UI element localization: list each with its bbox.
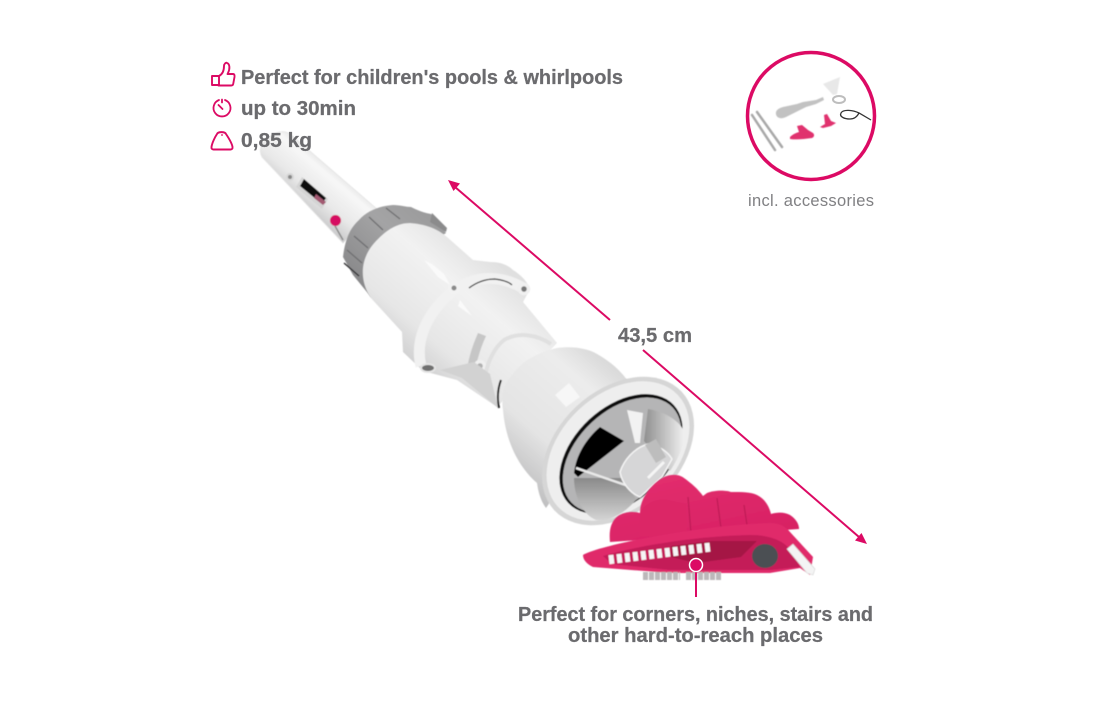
handle tube xyxy=(260,132,377,243)
callout text: other hard-to-reach places xyxy=(568,625,823,647)
white side brush xyxy=(787,544,815,575)
lower grey cone xyxy=(574,478,636,520)
base plate xyxy=(583,523,813,575)
accessories label: incl. accessories xyxy=(748,192,874,210)
accessory: vacuum xyxy=(776,97,824,118)
feature: pools: Perfect for children's pools & whirlpools xyxy=(241,67,623,89)
grey collar xyxy=(343,205,447,297)
accessory: poles xyxy=(752,112,782,150)
accessory: nozzle xyxy=(820,114,836,128)
accessory: ring xyxy=(833,96,845,103)
accessories badge xyxy=(748,52,874,180)
black wedge xyxy=(574,427,624,477)
grey lower bristles xyxy=(643,572,721,580)
icon: timer xyxy=(213,100,231,116)
pink brush head xyxy=(583,475,815,576)
icon: thumbs up xyxy=(212,63,235,86)
right light vane xyxy=(644,409,684,471)
white bristles xyxy=(608,543,710,564)
callout marker xyxy=(690,558,702,597)
transparent rim and intake xyxy=(513,347,723,555)
length label: 43,5 cm xyxy=(618,325,692,347)
callout text: Perfect for corners, niches, stairs and xyxy=(518,604,873,626)
flange ring xyxy=(419,278,523,366)
callout text xyxy=(518,604,873,647)
plate underside xyxy=(603,535,800,570)
bulb housing xyxy=(502,347,631,508)
product: pool vacuum xyxy=(260,132,815,576)
mid section shading xyxy=(467,333,486,386)
feature: runtime: up to 30min xyxy=(241,98,356,120)
wheel xyxy=(752,544,778,568)
accessory: hose xyxy=(841,110,871,120)
accessory: filter bag xyxy=(823,77,840,95)
main white body xyxy=(363,223,557,408)
accessory: brush head xyxy=(790,125,814,139)
arrow: length dimension xyxy=(448,180,867,544)
white strut xyxy=(627,410,643,443)
feature: weight: 0,85 kg xyxy=(241,130,312,152)
icon: weight xyxy=(211,132,233,150)
